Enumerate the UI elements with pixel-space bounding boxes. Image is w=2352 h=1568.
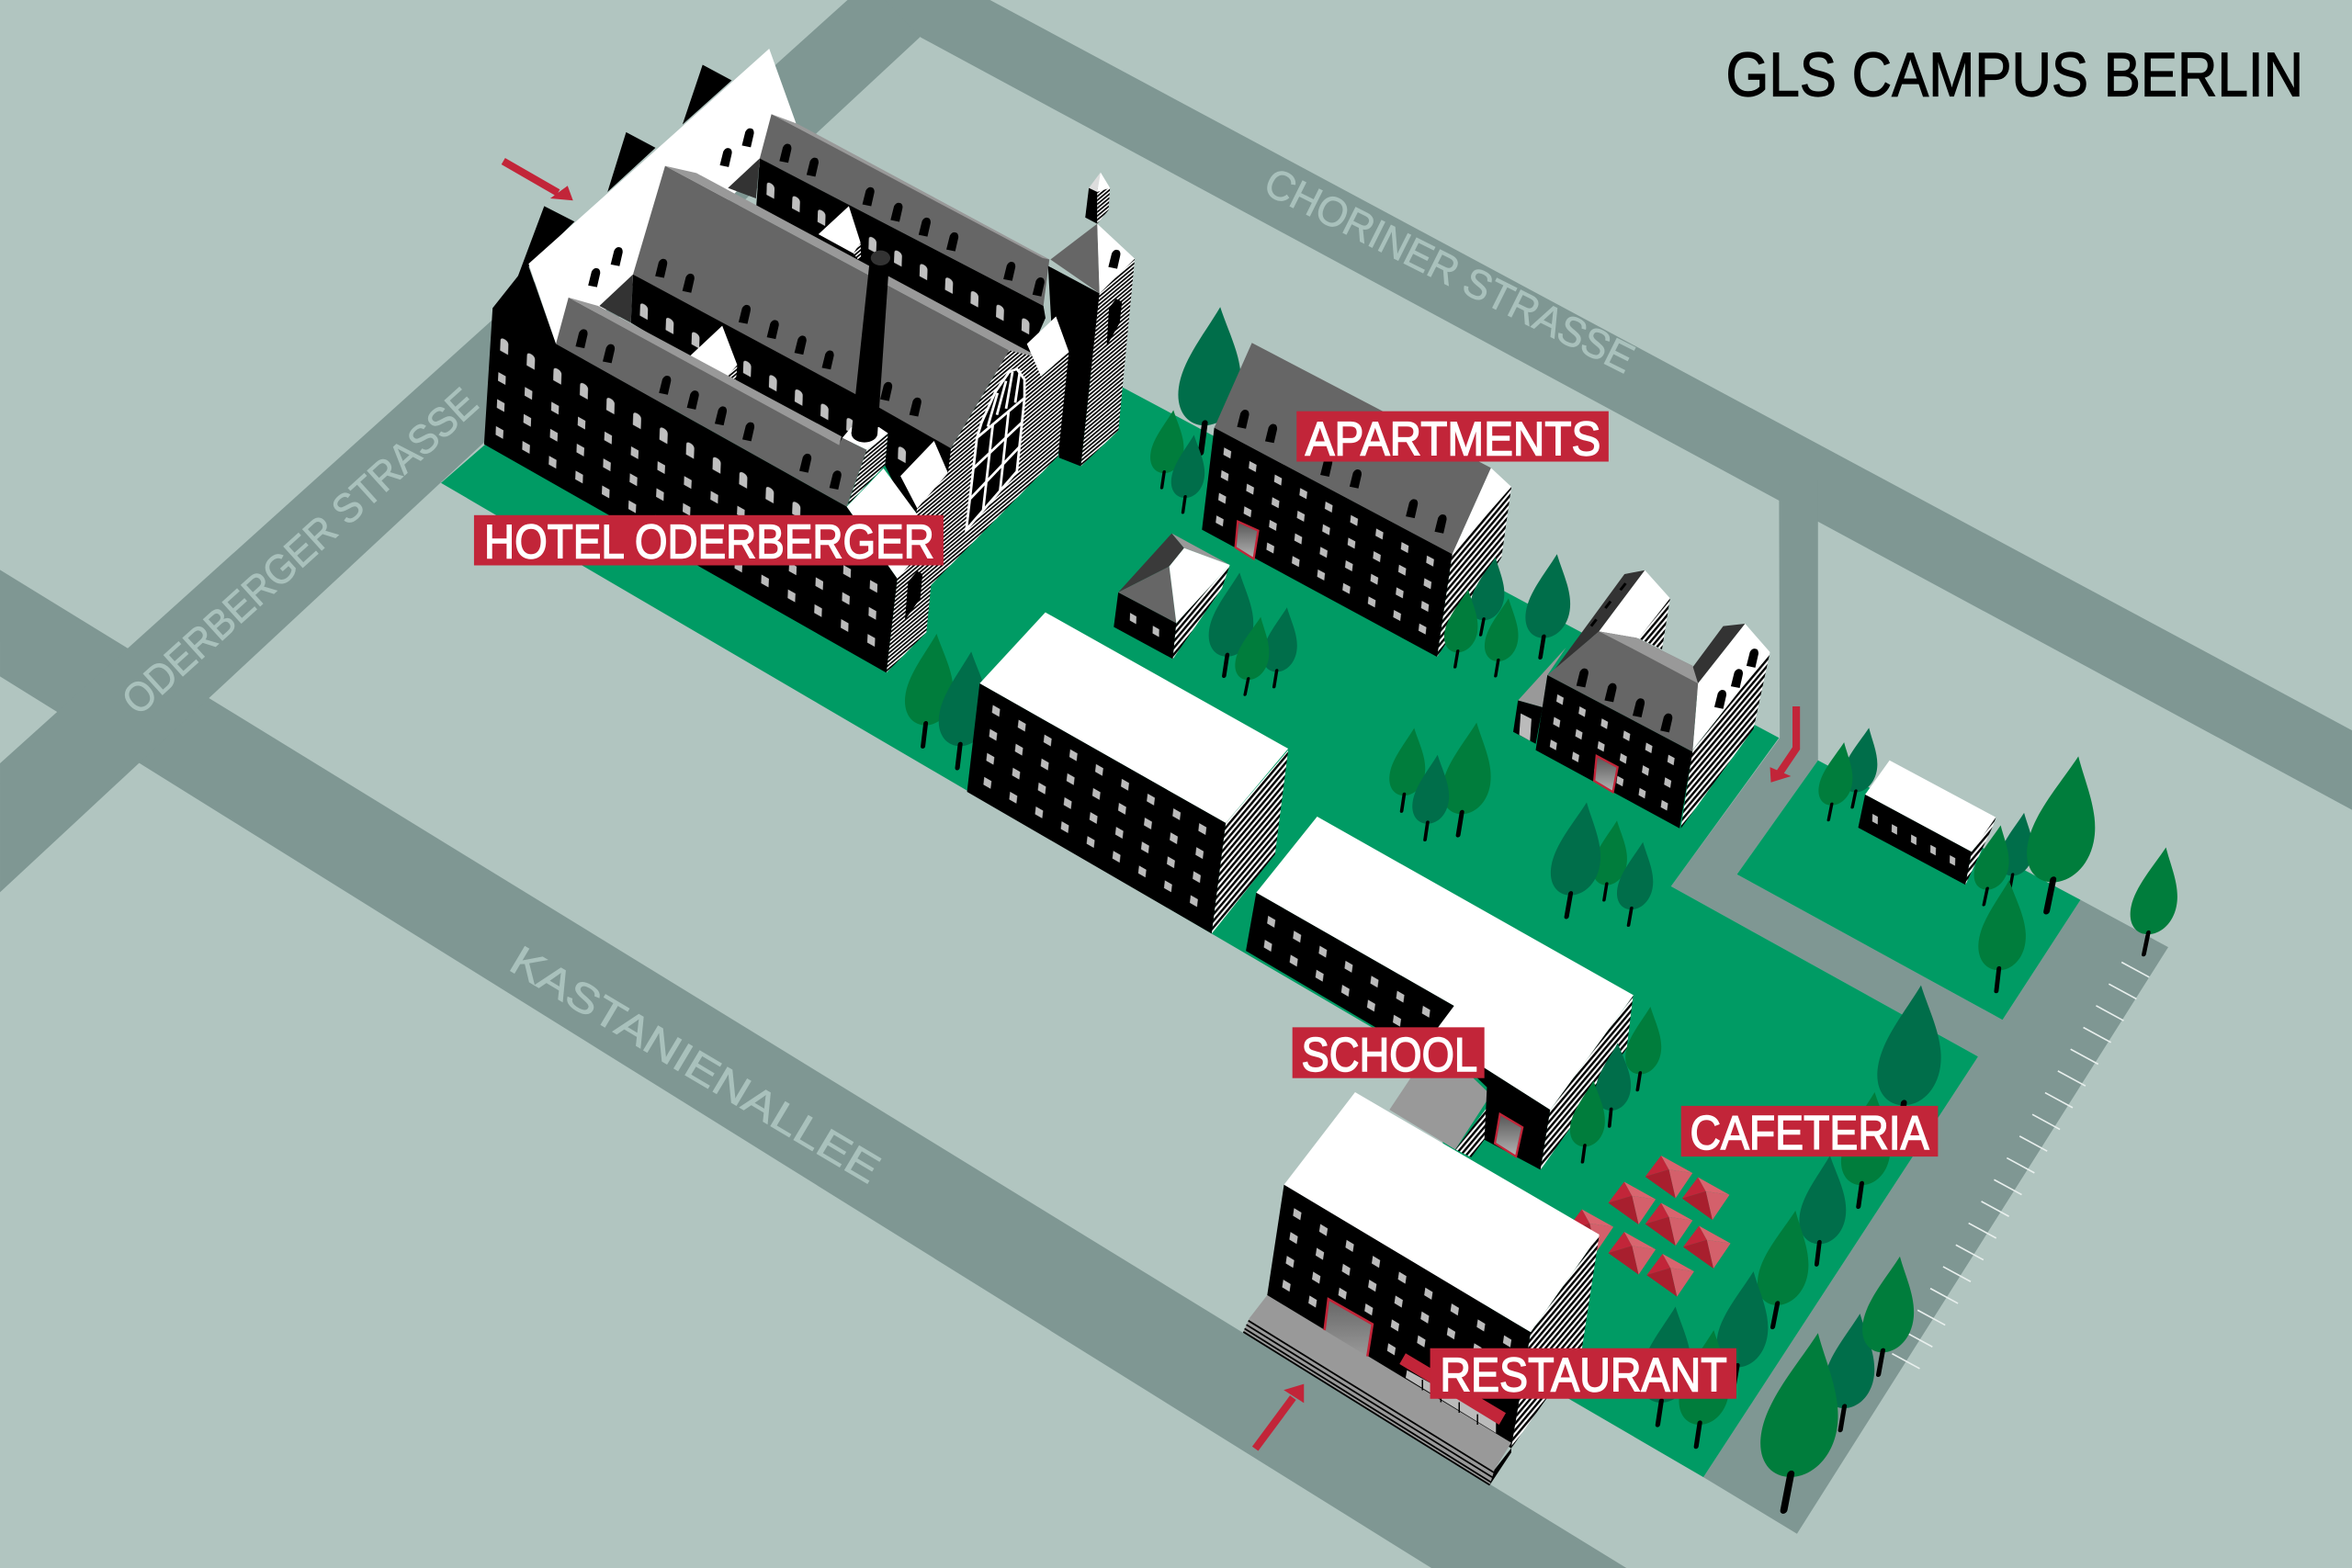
road label: Choriner Strasse: CHORINER STRASSE xyxy=(1258,158,1642,382)
building: villa xyxy=(1513,570,1770,829)
school hatched recess xyxy=(1455,1102,1491,1157)
road: driveway and parking strip xyxy=(1671,479,2168,1534)
trees right plot xyxy=(1967,756,2188,991)
road: Oderberger Strasse xyxy=(0,0,960,892)
trees right of school xyxy=(1566,1007,1668,1162)
hotel long white gable wall xyxy=(528,49,797,344)
label: School: SCHOOL xyxy=(1301,1029,1477,1082)
lawn: main campus xyxy=(441,365,1978,1477)
trees left of long building xyxy=(899,634,996,768)
hotel right white gable xyxy=(1027,316,1069,377)
label: Cafeteria: CAFETERIA xyxy=(1690,1107,1929,1160)
hotel end wall window xyxy=(905,571,922,620)
trees along cafeteria xyxy=(1633,986,1952,1447)
hotel middle wing roof xyxy=(633,166,1041,448)
arrow: hotel entrance xyxy=(503,162,573,200)
apartments roof xyxy=(1215,343,1511,554)
apartments walls and windows xyxy=(1202,428,1511,657)
restaurant entrance door xyxy=(1325,1299,1373,1357)
hotel rear small white gable xyxy=(819,206,861,259)
school door xyxy=(1495,1114,1522,1156)
cafeteria umbrellas xyxy=(1566,1156,1731,1297)
hotel front wing hatch sliver xyxy=(847,434,888,505)
trees behind apartments xyxy=(1146,307,1251,513)
road label: Kastanienallee: KASTANIENALLEE xyxy=(503,936,888,1192)
hotel front white gables xyxy=(847,441,948,579)
restaurant plinth xyxy=(1243,1295,1511,1485)
parking bay lines xyxy=(1892,962,2149,1369)
road label: Oderberger Strasse: ODERBERGER STRASSE xyxy=(113,378,486,724)
restaurant wall and windows xyxy=(1267,1185,1531,1449)
building: small house xyxy=(1114,534,1230,659)
building: long white-roof block xyxy=(967,613,1288,933)
hotel middle white gable xyxy=(689,326,737,384)
hotel chimney xyxy=(842,251,890,450)
hotel front wall with windows xyxy=(484,264,898,672)
restaurant hatched end wall xyxy=(1511,1235,1600,1449)
road: Kastanienallee xyxy=(0,570,1627,1568)
trees by driveway xyxy=(1543,802,1660,925)
villa front tower xyxy=(1681,624,1770,829)
villa side wing xyxy=(1513,648,1566,744)
hotel tower xyxy=(1048,173,1135,467)
school front wing wall xyxy=(1432,1035,1550,1169)
hotel rear black gables xyxy=(517,65,731,277)
trees right of apartments xyxy=(1439,554,1578,676)
building: apartments xyxy=(1202,343,1511,657)
building: Hotel Oderberger xyxy=(484,49,1135,672)
road: Choriner Strasse xyxy=(885,0,2352,810)
label: Hotel Oderberger: HOTEL ODERBERGER xyxy=(484,515,934,569)
trees on parking strip xyxy=(1747,1257,1925,1510)
hotel rear wing wall xyxy=(728,158,1046,360)
school rear wing wall xyxy=(1246,893,1454,1055)
label: Apartments: APARTMENTS xyxy=(1306,412,1600,466)
hotel arched hall window xyxy=(967,369,1024,530)
lawn: right plot xyxy=(1737,761,2080,1020)
trees left of small block xyxy=(1812,728,1886,819)
villa door xyxy=(1594,756,1618,792)
villa main roof xyxy=(1547,631,1698,751)
arrow: driveway entrance xyxy=(1770,706,1796,783)
hotel large hatched end wall xyxy=(887,351,1069,672)
trees mid lawn xyxy=(1385,723,1500,840)
building: school xyxy=(1246,817,1634,1169)
hotel front wing roof xyxy=(556,298,866,507)
school gray forecourt xyxy=(1389,1067,1491,1149)
restaurant shop windows xyxy=(1406,1371,1496,1433)
label: Restaurant: RESTAURANT xyxy=(1440,1348,1727,1402)
trees by small house xyxy=(1203,572,1304,694)
restaurant red awning xyxy=(1399,1353,1506,1425)
apartments door xyxy=(1236,522,1258,558)
arrow: restaurant entrance xyxy=(1255,1384,1304,1449)
hotel middle wing wall xyxy=(599,275,951,513)
building: small block right plot xyxy=(1859,761,1996,885)
hotel gable windows xyxy=(588,129,754,288)
villa wall and windows xyxy=(1536,675,1692,829)
hotel rear wing roof xyxy=(760,114,1049,306)
restaurant white roof xyxy=(1284,1092,1600,1332)
school white roof xyxy=(1256,817,1634,1110)
school hatched end wall xyxy=(1541,996,1633,1169)
villa back tower xyxy=(1554,570,1670,671)
building: restaurant xyxy=(1243,1092,1600,1485)
